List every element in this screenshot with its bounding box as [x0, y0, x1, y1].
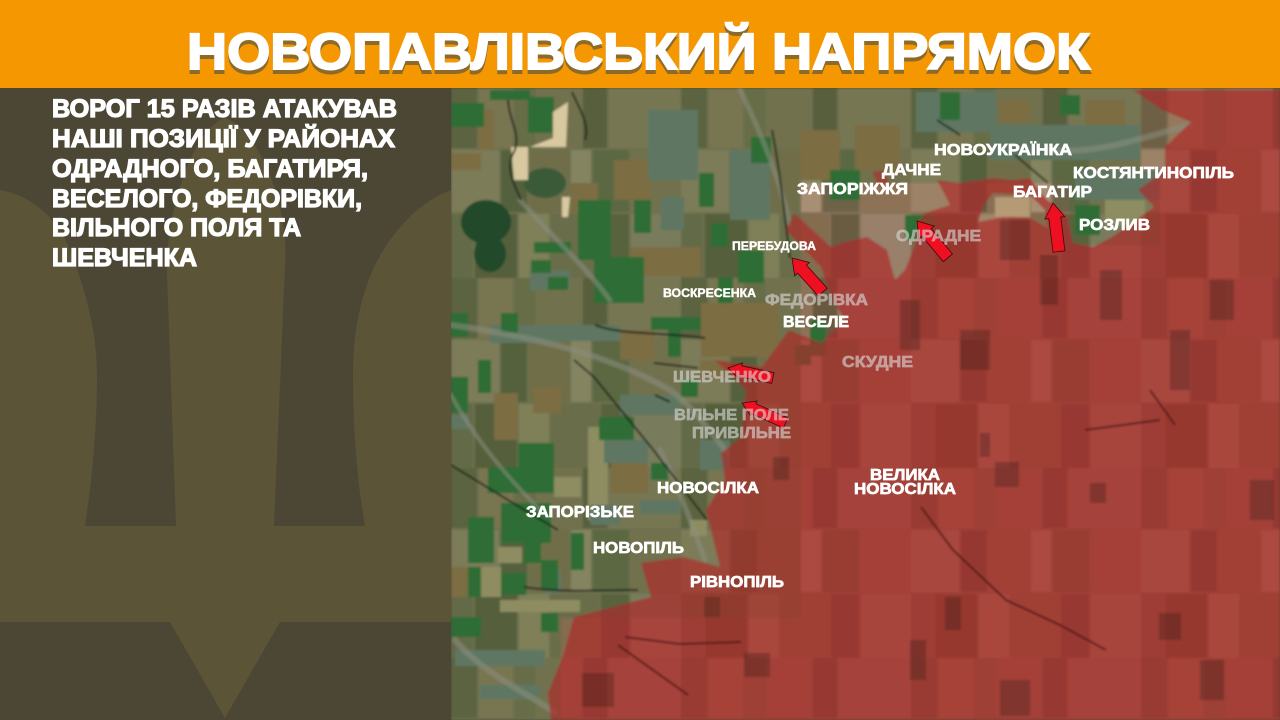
- label: Novoukrainka: НОВОУКРАЇНКА: [934, 141, 1072, 159]
- map: base farmland fields: [451, 88, 1280, 720]
- heading: left panel text block: ВЕСЕЛОГО, ФЕДОРІВКИ,: [52, 185, 362, 213]
- header bar: [0, 0, 1280, 88]
- map: brown fields: [451, 100, 1125, 597]
- map: green tint over unoccupied farmland: [451, 88, 1160, 720]
- label: Pryvilne: ПРИВІЛЬНЕ: [692, 425, 791, 442]
- heading: left panel text block: ВІЛЬНОГО ПОЛЯ ТА: [52, 214, 301, 242]
- label: Fedorivka: ФЕДОРІВКА: [765, 292, 868, 309]
- label: Rivnopil: РІВНОПІЛЬ: [690, 574, 784, 591]
- label: Vilne Pole: ВІЛЬНЕ ПОЛЕ: [674, 407, 789, 424]
- map: dark forest patches: [461, 168, 566, 272]
- map: tan fields: [481, 195, 1145, 612]
- label: Novopil: НОВОПІЛЬ: [593, 540, 684, 557]
- title: НОВОПАВЛІВСЬКИЙ НАПРЯМОК: [187, 22, 1091, 80]
- arrow: attack towards Vilne Pole: [739, 396, 789, 430]
- label: Perebudova: ПЕРЕБУДОВА: [732, 241, 816, 253]
- heading: left panel text block: ВОРОГ 15 РАЗІВ АТАКУВАВ: [52, 95, 397, 123]
- label: Skudne: СКУДНЕ: [842, 354, 913, 371]
- label: Zaporizke: ЗАПОРІЗЬКЕ: [526, 504, 634, 521]
- map: grey-green fields and settlements: [451, 92, 1160, 699]
- map: bright green fields: [451, 90, 1100, 637]
- label: Rozlyv: РОЗЛИВ: [1079, 217, 1150, 234]
- map: dark rivers: [451, 92, 1048, 591]
- map: red occupied territory overlay: [548, 90, 1280, 720]
- label: Dachne: ДАЧНЕ: [882, 162, 941, 179]
- map: pale bare fields: [511, 102, 570, 217]
- map: valleys and settlement strips: [451, 90, 1190, 712]
- label: Velyka: ВЕЛИКА: [870, 467, 940, 484]
- label: Novosilka (Velyka): НОВОСІЛКА: [854, 481, 956, 498]
- map: small red patch near Dachne: [872, 170, 890, 186]
- arrow: attack towards Bahatyr: [1043, 202, 1069, 253]
- panel: satellite map: [451, 88, 1280, 720]
- heading: left panel text block: ОДРАДНОГО, БАГАТИРЯ,: [52, 155, 368, 183]
- label: Bahatyr: БАГАТИР: [1013, 184, 1092, 201]
- map: dark fields in red zone: [582, 220, 1274, 716]
- label: Kostiantynopil: КОСТЯНТИНОПІЛЬ: [1073, 165, 1234, 182]
- label: Novosilka: НОВОСІЛКА: [657, 480, 759, 497]
- icon: trident emblem watermark: [0, 118, 451, 718]
- label: Voskresenka: ВОСКРЕСЕНКА: [663, 288, 756, 300]
- map labels: [526, 141, 1234, 591]
- arrow: attack towards Odradne: [909, 215, 956, 264]
- heading: left panel text block: НАШІ ПОЗИЦІЇ У РАЙОНАХ: [52, 123, 395, 153]
- label: Zaporizhzhia: ЗАПОРІЖЖЯ: [797, 181, 908, 198]
- map: dark ravines in red zone: [618, 390, 1175, 695]
- heading: left panel text block: ШЕВЧЕНКА: [52, 244, 197, 272]
- heading: left panel text block: [52, 95, 397, 272]
- label: Vesele: ВЕСЕЛЕ: [783, 314, 849, 331]
- label: Odradne: ОДРАДНЕ: [896, 228, 981, 245]
- label: Shevchenko: ШЕВЧЕНКО: [673, 369, 771, 386]
- map: imagery layer: [451, 88, 1280, 720]
- left panel background: [0, 88, 451, 720]
- arrow: attack towards Shevchenko: [726, 360, 775, 385]
- arrow: attack towards Perebudova: [785, 251, 830, 299]
